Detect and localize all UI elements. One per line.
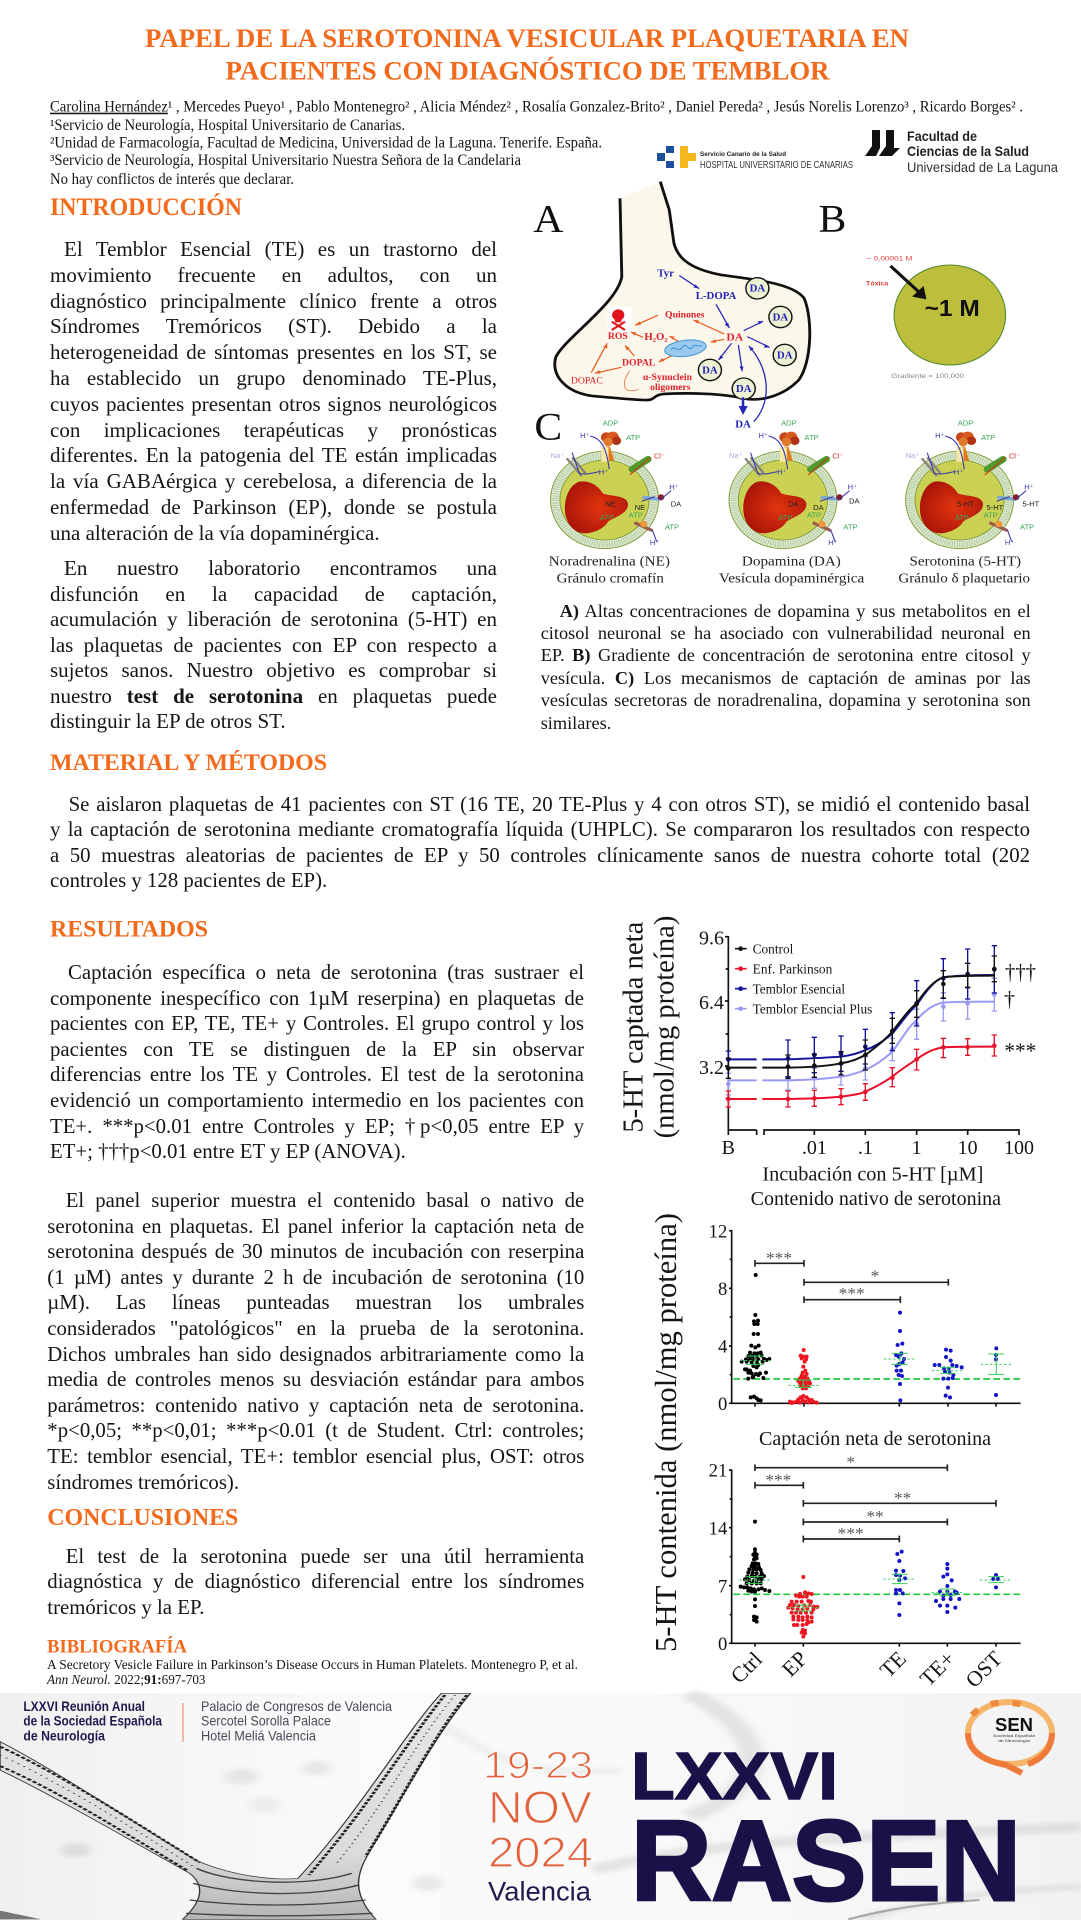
vesicle: noradrenaline: DA xyxy=(671,500,681,508)
vesicle: serotonin: H⁺ xyxy=(935,431,945,440)
text: figure caption: vesículas secretoras de noradrenalina, dopamina y serotonina son xyxy=(541,690,1031,710)
axes: 21 xyxy=(709,1461,727,1482)
text: figure caption: vesícula. C) Los mecanismos de captación de aminas por las xyxy=(541,668,1031,688)
panel B: concentration gradient: Gradiente = 100,000 xyxy=(891,373,964,380)
axes: 6.4 xyxy=(699,992,724,1014)
panel B: concentration gradient: B xyxy=(819,197,846,240)
text: resultados paragraph 1: componente inespecífico con 1µM reserpina) en plaquetas de xyxy=(50,987,584,1010)
text: conclusiones xyxy=(47,1545,584,1619)
vesicle: noradrenaline: H⁺ xyxy=(669,483,679,492)
vesicle: serotonin: Na⁺ xyxy=(906,451,919,460)
text: figure caption: citosol neuronal se ha asociado con vulnerabilidad neuronal en xyxy=(541,623,1031,643)
chart: net serotonin uptake xyxy=(709,1428,1021,1692)
congress text xyxy=(23,1698,162,1743)
vesicle: dopamine: Na⁺ xyxy=(729,451,743,460)
vesicle: dopamine: ATP xyxy=(843,523,858,531)
text: figure caption: EP. B) Gradiente de concentración de serotonina entre citosol y xyxy=(541,645,1031,665)
significance brackets xyxy=(755,1260,948,1303)
congress name: LXXVI xyxy=(631,1739,838,1814)
bibliography: A Secretory Vesicle Failure in Parkinson’s Disease Occurs in Human Platelets. Montenegro P, et al. xyxy=(47,1657,578,1672)
vesicle: noradrenaline: H⁺ xyxy=(580,431,590,440)
chart: net serotonin uptake: *** xyxy=(838,1524,864,1543)
axes xyxy=(709,1461,1021,1692)
text: resultados paragraph 2: considerados "patológicos" en la prueba de la serotonina. xyxy=(47,1317,584,1340)
axes: Ctrl xyxy=(726,1647,767,1688)
shared y axis title: 5-HT contenida: 5-HT contenida (nmol/mg proteína) xyxy=(648,1213,683,1652)
title: PAPEL DE LA SEROTONINA VESICULAR PLAQUETARIA EN xyxy=(145,24,909,53)
significance marks: ††† xyxy=(1005,959,1036,984)
text: resultados paragraph 1: pacientes con TE se distinguen de la EP sin observar xyxy=(50,1038,584,1061)
panel A: dopaminergic terminal: DA xyxy=(726,332,743,344)
authors and affiliations: ¹Servicio de Neurología, Hospital Universitario de Canarias. xyxy=(50,117,405,134)
vesicle: dopamine xyxy=(729,419,860,549)
text: introducción paragraph 1: diferentes. En la patogenia del TE están implicadas xyxy=(50,443,497,467)
legend: Enf. Parkinson xyxy=(753,961,833,976)
text: resultados paragraph 1: TE+. ***p<0.01 entre Controles y EP; †p<0,05 entre EP y xyxy=(50,1115,584,1138)
text: introducción paragraph 1: heterogeneidad de síntomas presentes en los ST, se xyxy=(50,340,497,364)
text: resultados paragraph 1 xyxy=(50,961,584,1163)
series: temblor esencial plus xyxy=(726,978,997,1095)
axes: 1 xyxy=(912,1137,922,1159)
panel A: dopaminergic terminal: DOPAC xyxy=(571,377,603,386)
y axis title: (nmol/mg proteína) xyxy=(648,916,680,1138)
axes xyxy=(709,1221,1021,1415)
axes: 10 xyxy=(958,1137,978,1159)
axes: .01 xyxy=(802,1137,827,1159)
vesicle: dopamine: H⁺ xyxy=(828,538,838,547)
text: introducción paragraph 1 xyxy=(50,237,497,545)
panel A: dopaminergic terminal: DA xyxy=(702,366,718,376)
significance marks: † xyxy=(1004,987,1015,1012)
axes: TE+ xyxy=(915,1647,960,1691)
chart: net serotonin uptake curves xyxy=(617,916,1036,1186)
axes: 14 xyxy=(709,1518,728,1539)
text: figure caption: A) Altas concentraciones de dopamina y sus metabolitos en el xyxy=(560,600,1031,620)
figure: panels A, B, C xyxy=(533,182,1040,586)
vesicle: serotonin: 5-HT xyxy=(987,503,1004,512)
venue text: Hotel Meliá Valencia xyxy=(201,1727,316,1743)
legend: Temblor Esencial xyxy=(753,981,845,996)
panel A: dopaminergic terminal: Quinones xyxy=(665,311,705,320)
vesicle: noradrenaline: ATP xyxy=(629,511,643,519)
axes: 0 xyxy=(718,1634,727,1655)
series: control xyxy=(726,956,997,1078)
text: resultados paragraph 2: síndromes tremóricos). xyxy=(47,1471,239,1494)
banner: congress footer xyxy=(0,1693,1081,1920)
threshold line xyxy=(733,1592,1021,1597)
text: material y métodos: a 50 muestras aleatorias de pacientes de EP y 50 controles clínicamente sanos de nuestra cohorte total (202 xyxy=(50,844,1030,867)
vesicle: serotonin: ATP xyxy=(955,513,969,522)
text: introducción paragraph 1: cuyos pacientes presentan otros signos neurológicos xyxy=(50,392,497,416)
text: resultados paragraph 1: pacientes con EP, TE, TE+ y Controles. El grupo control y los xyxy=(50,1012,584,1035)
chart: native serotonin content: * xyxy=(871,1267,879,1286)
text: figure caption: similares. xyxy=(541,713,611,733)
congress name xyxy=(631,1739,1021,1920)
panel A: dopaminergic terminal: DA xyxy=(777,351,793,361)
congress dates: 19-23 xyxy=(483,1745,593,1787)
text: introducción paragraph 2: disfunción en la capacidad de captación, xyxy=(50,582,497,606)
logo: Facultad de Ciencias de la Salud: Ciencias de la Salud xyxy=(907,143,1029,159)
axes: 4 xyxy=(718,1337,728,1358)
venue text: Sercotel Sorolla Palace xyxy=(201,1713,331,1729)
heading: conclusiones: CONCLUSIONES xyxy=(47,1505,238,1531)
vesicle captions xyxy=(549,554,1030,586)
text: introducción paragraph 2 xyxy=(50,556,497,733)
chart: native serotonin content: *** xyxy=(839,1284,865,1303)
text: introducción paragraph 2: nuestro test de serotonina en plaquetas puede xyxy=(50,684,497,708)
text: introducción paragraph 1: Síndromes Tremóricos (ST). Debido a la xyxy=(50,314,497,338)
axes: B xyxy=(722,1137,735,1159)
chart: native serotonin content xyxy=(709,1188,1021,1415)
authors and affiliations xyxy=(50,99,1023,188)
logo: Hospital Universitario de Canarias xyxy=(657,146,853,171)
vesicle: serotonin: ADP xyxy=(958,419,973,428)
panel A: dopaminergic terminal: Tyr xyxy=(657,269,674,279)
vesicle: noradrenaline: NE xyxy=(635,503,645,512)
text: introducción paragraph 1: movimiento frecuente en adultos, con un xyxy=(50,263,497,287)
vesicle: noradrenaline: NE xyxy=(605,500,616,509)
vesicle: dopamine: ATP xyxy=(807,511,821,519)
congress text: de Neurología xyxy=(23,1727,105,1743)
vesicle: dopamine: ADP xyxy=(781,419,797,428)
bibliography: BIBLIOGRAFÍA xyxy=(47,1635,188,1657)
text: resultados paragraph 2: serotonina después de 30 minutos de incubación con reserpina xyxy=(47,1240,584,1263)
text: resultados paragraph 2: El panel superior muestra el contenido basal o nativo de xyxy=(66,1189,584,1212)
significance marks xyxy=(1004,959,1036,1063)
title: PACIENTES CON DIAGNÓSTICO DE TEMBLOR xyxy=(226,56,830,86)
chart: net serotonin uptake: ** xyxy=(894,1488,911,1507)
congress dates: 2024 xyxy=(488,1829,593,1877)
logo: Facultad de Ciencias de la Salud: Facultad de xyxy=(907,128,977,144)
axes: TE xyxy=(875,1647,911,1682)
logo: Facultad de Ciencias de la Salud xyxy=(865,128,1058,175)
panel C: secretory vesicles xyxy=(534,405,1040,586)
vesicle: dopamine: DA xyxy=(849,497,860,505)
panel A: dopaminergic terminal xyxy=(533,182,810,431)
authors and affiliations: ³Servicio de Neurología, Hospital Universitario Nuestra Señora de la Candelaria xyxy=(50,152,521,169)
vesicle: serotonin: ATP xyxy=(984,511,998,519)
text: introducción paragraph 1: diagnóstico principalmente clínico frente a otros xyxy=(50,289,497,313)
venue text: Palacio de Congresos de Valencia xyxy=(201,1698,392,1714)
text: material y métodos xyxy=(50,792,1030,892)
logo: SEN xyxy=(968,1702,1052,1773)
vesicle captions: Vesícula dopaminérgica xyxy=(719,571,865,586)
text: resultados paragraph 1: diferencias entre los TE y Controles. El test de la serotonina xyxy=(50,1063,584,1086)
vesicle captions: Noradrenalina (NE) xyxy=(549,554,670,569)
vesicle: noradrenaline: ATP xyxy=(600,513,614,522)
significance brackets xyxy=(755,1464,996,1542)
text: introducción paragraph 2: acumulación y liberación de serotonina (5-HT) en xyxy=(50,607,497,631)
legend xyxy=(735,941,872,1016)
authors and affiliations: ²Unidad de Farmacología, Facultad de Medicina, Universidad de la Laguna. Tenerife. España. xyxy=(50,134,602,152)
y axis title xyxy=(617,916,680,1138)
vesicle: serotonin: Cl⁻ xyxy=(1009,452,1020,461)
logo: SEN: Sociedad Española xyxy=(993,1733,1036,1738)
vesicle: noradrenaline: Na⁺ xyxy=(551,451,564,460)
mean and error markers xyxy=(739,1574,1012,1611)
text: resultados paragraph 1: ET+; †††p<0.01 entre ET y EP (ANOVA). xyxy=(50,1140,406,1163)
vesicle: serotonin: ATP xyxy=(1020,523,1034,531)
title xyxy=(145,24,909,86)
logo: Hospital Universitario de Canarias: HOSPITAL UNIVERSITARIO DE CANARIAS xyxy=(700,159,853,171)
vesicle: noradrenaline: Cl⁻ xyxy=(654,452,665,461)
panel A: dopaminergic terminal: α-Synuclein xyxy=(643,373,693,383)
congress text: de la Sociedad Española xyxy=(23,1713,162,1729)
text: resultados paragraph 2: parámetros: contenido nativo y captación neta de serotonina. xyxy=(47,1394,584,1417)
panel B: concentration gradient xyxy=(819,197,1006,380)
logo: Facultad de Ciencias de la Salud: Universidad de La Laguna xyxy=(907,159,1058,175)
heading: introducción: INTRODUCCIÓN xyxy=(50,193,242,221)
text: material y métodos: Se aislaron plaquetas de 41 pacientes con ST (16 TE, 20 TE-Plus y 4 con otros ST), se midió el contenido basal xyxy=(69,792,1030,816)
vesicle: noradrenaline: ADP xyxy=(603,419,618,428)
vesicle: serotonin: 5-HT xyxy=(1023,500,1040,508)
text: introducción paragraph 2: En nuestro laboratorio encontramos una xyxy=(64,556,497,580)
text: resultados paragraph 1: evidenció un comportamiento intermedio en los pacientes con xyxy=(50,1089,584,1112)
heading: material y métodos: MATERIAL Y MÉTODOS xyxy=(50,750,327,776)
text: material y métodos: y la captación de serotonina mediante cromatografía líquida (UHPLC). Se compararon los resultados con respecto xyxy=(50,818,1030,841)
text: resultados paragraph 2: TE: temblor esencial, TE+: temblor esencial plus, OST: otros xyxy=(47,1445,584,1468)
axes: 3.2 xyxy=(699,1057,724,1079)
neuron image xyxy=(0,1693,1081,1919)
chart: native serotonin content: Contenido nativo de serotonina xyxy=(751,1188,1001,1210)
text: introducción paragraph 1: una alteración de la vía dopaminérgica. xyxy=(50,521,380,545)
legend: Control xyxy=(753,941,794,956)
chart: native serotonin content: *** xyxy=(766,1248,792,1267)
logo: Hospital Universitario de Canarias: Servicio Canario de la Salud xyxy=(700,151,786,158)
text: introducción paragraph 2: sujetos sanos. Nuestro objetivo es comprobar si xyxy=(50,658,497,682)
vesicle: serotonin: ATP xyxy=(981,433,995,442)
bibliography xyxy=(46,1635,578,1687)
text: resultados paragraph 2: µM). Las líneas punteadas muestran los umbrales xyxy=(47,1291,584,1314)
text: introducción paragraph 1: ha establecido un grupo denominado TE-Plus, xyxy=(50,366,497,390)
panel B: concentration gradient: Tóxica xyxy=(866,281,888,288)
vesicle: dopamine: ATP xyxy=(778,513,793,522)
text: introducción paragraph 2: las plaquetas de pacientes con EP con respecto a xyxy=(50,633,497,657)
threshold line xyxy=(733,1376,1021,1381)
vesicle captions: Gránulo cromafín xyxy=(557,571,665,586)
vesicle: dopamine: ATP xyxy=(805,433,819,442)
axes: .1 xyxy=(858,1137,873,1159)
congress dates: NOV xyxy=(488,1782,592,1833)
chart: net serotonin uptake: Captación neta de serotonina xyxy=(759,1428,991,1450)
panel A: dopaminergic terminal: DA xyxy=(773,313,789,323)
text: introducción paragraph 1: El Temblor Esencial (TE) es un trastorno del xyxy=(64,237,497,261)
axes: EP xyxy=(777,1647,812,1681)
logo: SEN: de Neurología xyxy=(998,1738,1031,1743)
vesicle: noradrenaline: H⁺ xyxy=(650,538,659,547)
vesicle: dopamine: H⁺ xyxy=(848,483,857,492)
axes: 100 xyxy=(1004,1137,1034,1159)
text: conclusiones: El test de la serotonina puede ser una útil herramienta xyxy=(66,1545,584,1568)
vesicle: dopamine: DA xyxy=(813,503,824,512)
panel C: secretory vesicles: C xyxy=(534,405,562,448)
text: resultados paragraph 2: media de controles menos su desviación estándar para ambos xyxy=(47,1368,584,1391)
venue text xyxy=(201,1698,392,1743)
authors and affiliations: Carolina Hernández¹ , Mercedes Pueyo¹ , Pablo Montenegro² , Alicia Méndez² , Rosalía Gonzalez-Brito² , Daniel Pereda² , Jesús Norelis Lorenzo³ , Ricardo Borges² . xyxy=(50,99,1023,116)
axes: 9.6 xyxy=(699,927,724,949)
panel B: concentration gradient: ~ 0,00001 M xyxy=(866,256,913,263)
panel A: dopaminergic terminal: DA xyxy=(750,284,766,295)
text: material y métodos: controles y 128 pacientes de EP). xyxy=(50,869,327,892)
data points xyxy=(741,1522,998,1637)
text: resultados paragraph 2 xyxy=(47,1189,584,1494)
axes: 8 xyxy=(718,1279,727,1300)
vesicle: noradrenaline: H⁺ xyxy=(599,468,608,476)
axes: 7 xyxy=(718,1576,727,1597)
bibliography: Ann Neurol. 2022;91:697-703 xyxy=(46,1672,206,1687)
authors and affiliations: No hay conflictos de interés que declarar. xyxy=(50,171,294,188)
panel A: dopaminergic terminal: DA xyxy=(735,420,751,431)
vesicle: noradrenaline: ATP xyxy=(626,433,640,442)
significance marks: *** xyxy=(1004,1038,1036,1063)
text: resultados paragraph 1: Captación específica o neta de serotonina (tras sustraer el xyxy=(68,961,584,984)
text: resultados paragraph 2: *p<0,05; **p<0,01; ***p<0.01 (t de Student. Ctrl: controles; xyxy=(47,1419,584,1442)
panel A: dopaminergic terminal: oligomers xyxy=(650,383,691,393)
text: conclusiones: diagnóstica y de diagnóstico diferencial entre los síndromes xyxy=(47,1570,584,1593)
axes xyxy=(699,927,1034,1186)
congress city: Valencia xyxy=(488,1877,592,1907)
panel A: dopaminergic terminal: A xyxy=(533,197,563,240)
vesicle: serotonin xyxy=(906,419,1040,549)
text: introducción paragraph 1: la vía GABAérgica y cerebelosa, a diferencia de la xyxy=(50,469,497,493)
vesicle: dopamine: H⁺ xyxy=(758,431,768,440)
vesicle: dopamine: Cl⁻ xyxy=(832,452,843,461)
panel B: concentration gradient: ~1 M xyxy=(925,296,980,321)
vesicle: serotonin: H⁺ xyxy=(1005,538,1014,547)
vesicle: dopamine: H⁺ xyxy=(777,468,787,476)
vesicle: noradrenaline: ATP xyxy=(665,523,679,531)
y axis title: 5-HT captada neta xyxy=(617,921,649,1133)
axes: 0 xyxy=(718,1394,727,1415)
panel A: dopaminergic terminal: DA xyxy=(736,384,752,395)
series: enfermedad de Parkinson xyxy=(726,1035,997,1107)
chart: net serotonin uptake: * xyxy=(846,1452,855,1471)
text: conclusiones: tremóricos y la EP. xyxy=(47,1596,204,1619)
data points xyxy=(742,1275,996,1403)
axes: Incubación con 5-HT [µM] xyxy=(762,1164,983,1186)
mean and error markers xyxy=(740,1353,1012,1387)
text: resultados paragraph 2: Dichos umbrales han sido designados arbitrariamente como la xyxy=(47,1343,584,1366)
heading: resultados: RESULTADOS xyxy=(50,917,208,943)
vesicle: serotonin: 5-HT xyxy=(957,500,974,508)
panel A: dopaminergic terminal: H₂O₂ xyxy=(644,332,668,343)
panel A: dopaminergic terminal: DOPAL xyxy=(622,359,655,369)
text: resultados paragraph 2: (1 µM) antes y durante 2 h de incubación de serotonina (10 xyxy=(47,1266,584,1289)
congress text: LXXVI Reunión Anual xyxy=(23,1698,145,1714)
text: introducción paragraph 2: distinguir la EP de otros ST. xyxy=(50,709,286,733)
vesicle: noradrenaline xyxy=(551,419,681,549)
vesicle: serotonin: H⁺ xyxy=(954,468,963,476)
vesicle: dopamine: DA xyxy=(788,500,799,509)
text: introducción paragraph 1: enfermedad de Parkinson (EP), donde se postula xyxy=(50,495,497,519)
text: resultados paragraph 2: serotonina en plaquetas. El panel inferior la captación neta de xyxy=(47,1215,584,1238)
chart: net serotonin uptake: *** xyxy=(765,1471,791,1490)
panel A: dopaminergic terminal: ROS xyxy=(608,332,628,342)
axes: 12 xyxy=(709,1221,727,1242)
series: temblor esencial xyxy=(726,946,997,1077)
panel A: dopaminergic terminal: L-DOPA xyxy=(696,291,737,302)
logo: SEN: SEN xyxy=(995,1715,1033,1735)
vesicle captions: Dopamina (DA) xyxy=(742,554,841,569)
vesicle: serotonin: H⁺ xyxy=(1024,483,1034,492)
axes: OST xyxy=(961,1647,1007,1692)
vesicle captions: Serotonina (5-HT) xyxy=(910,554,1021,569)
chart: net serotonin uptake: ** xyxy=(866,1507,884,1526)
vesicle captions: Gránulo δ plaquetario xyxy=(898,571,1030,586)
text: figure caption xyxy=(540,600,1031,733)
text: introducción paragraph 1: con implicaciones terapéuticas y pronósticas xyxy=(50,418,497,442)
congress dates xyxy=(483,1745,593,1877)
legend: Temblor Esencial Plus xyxy=(753,1001,872,1016)
